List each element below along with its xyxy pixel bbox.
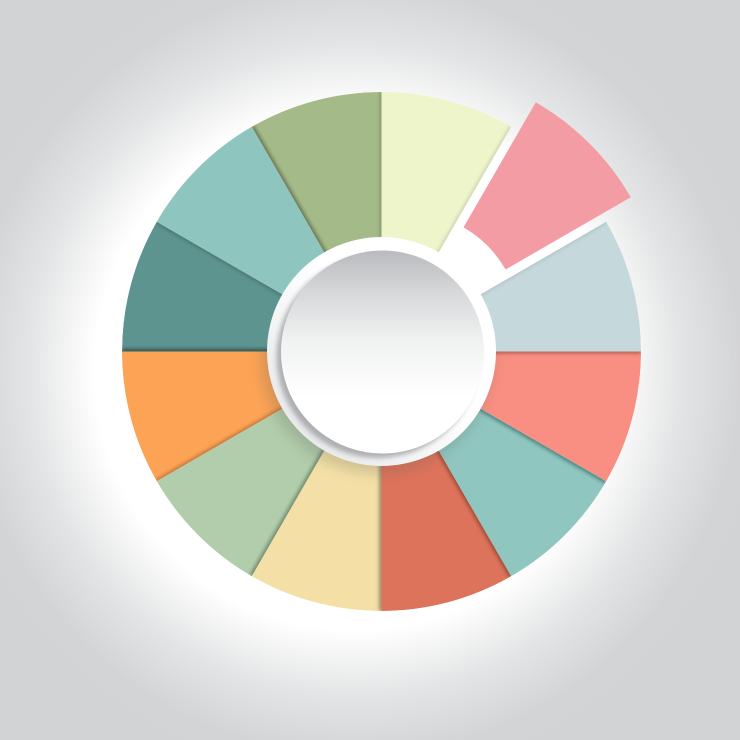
segment: dark teal xyxy=(122,222,282,352)
detached pink segment xyxy=(464,102,631,270)
segment: olive xyxy=(252,92,382,252)
inner disk xyxy=(281,250,484,454)
button cast shadow on lower segments xyxy=(256,352,498,478)
segment: light blue xyxy=(480,222,641,352)
white ring xyxy=(267,237,496,466)
segment: teal right xyxy=(439,408,606,576)
segment: cream xyxy=(382,92,511,252)
segment: salmon xyxy=(480,352,641,481)
segment: orange xyxy=(122,352,282,482)
center button xyxy=(261,237,496,474)
inner disk shadow xyxy=(276,255,480,458)
segment: pale yellow xyxy=(252,450,382,611)
segment: sage xyxy=(157,409,324,576)
segment: brick red xyxy=(382,450,512,611)
segment: mid teal xyxy=(157,127,382,352)
segmented wheel xyxy=(122,92,641,611)
